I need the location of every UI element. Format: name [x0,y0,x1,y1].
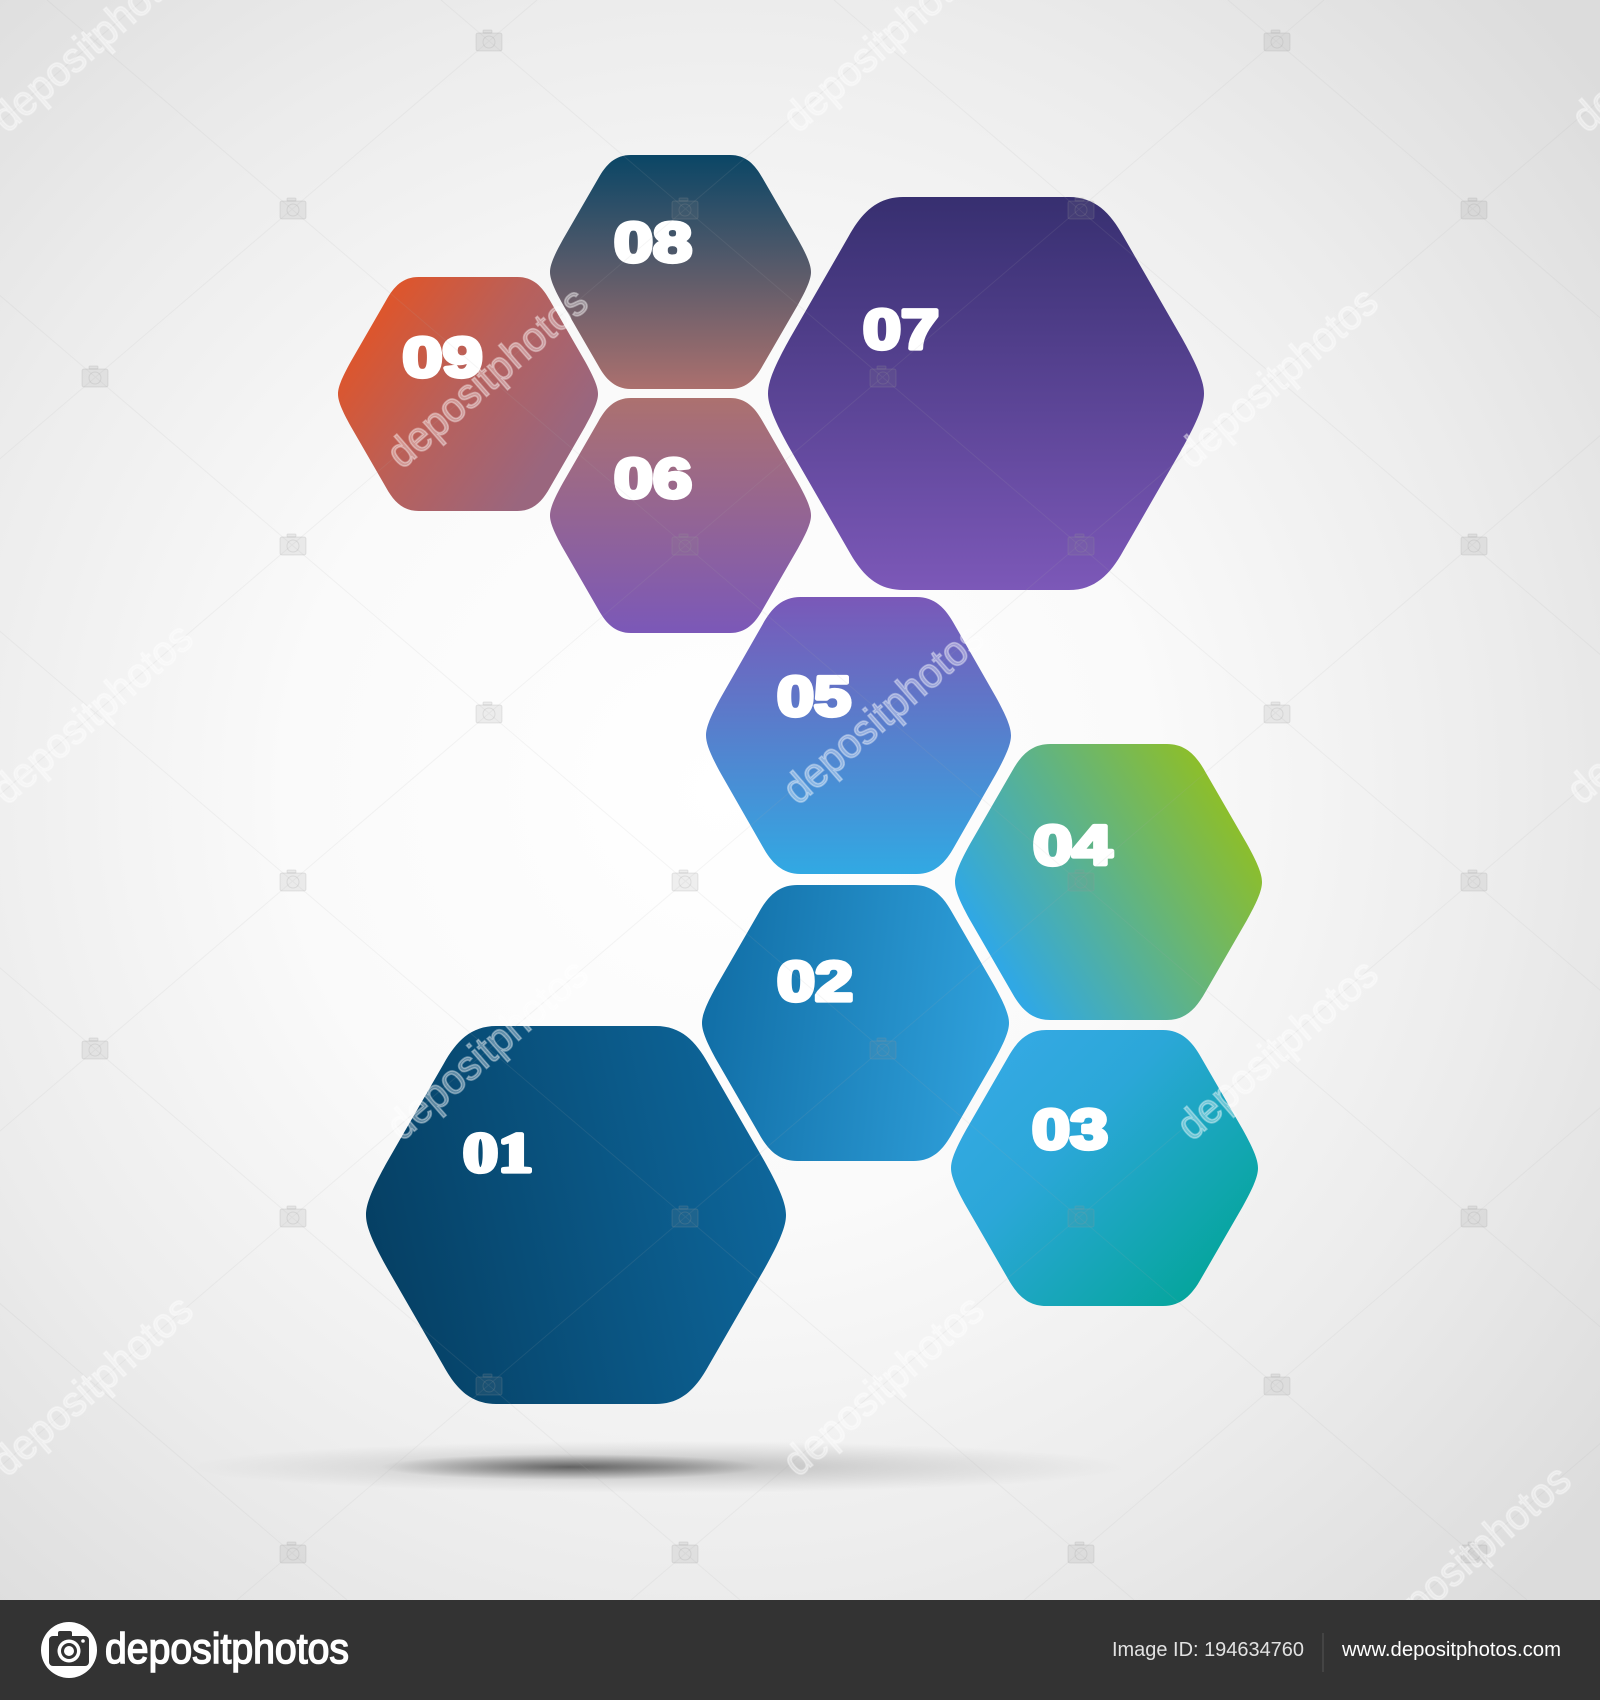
hexagon 02 [702,885,1009,1161]
hexagon 03: 03 [1032,1098,1108,1160]
depositphotos diagonal watermarks: depositphotos [377,949,597,1149]
hexagon 08 [550,155,811,389]
hexagons with numbers [338,155,1262,1404]
footer bar [0,1600,1600,1700]
hexagon 02: 02 [777,950,853,1012]
depositphotos diagonal watermarks: depositphotos [1167,277,1387,477]
hexagon 01 [366,1026,786,1404]
watermark camera icons [82,30,1487,1563]
depositphotos diagonal watermarks: depositphotos [1167,949,1387,1149]
hexagon 07 [768,197,1204,590]
floor shadow [190,1441,1130,1493]
hexagon 08: 08 [614,210,692,274]
hexagon 05 [706,597,1011,874]
hexagon 01: 01 [463,1122,533,1184]
hexagon 07: 07 [863,298,939,360]
hexagon 03 [951,1030,1258,1306]
icon: depositphotos camera logo [41,1622,97,1678]
depositphotos diagonal watermarks: depositphotos [773,613,993,813]
hexagon 04: 04 [1033,814,1112,876]
website url: www.depositphotos.com [1341,1639,1561,1661]
depositphotos diagonal watermarks: depositphotos [1360,1455,1580,1655]
hexagon 09: 09 [402,326,482,388]
depositphotos diagonal watermarks: depositphotos [773,1285,993,1485]
hexagon 09 [338,277,598,511]
logo wordmark: depositphotos [105,1625,349,1673]
hexagon 04 [955,744,1262,1020]
hexagon 05: 05 [777,664,851,728]
image id: Image ID: 194634760 [1112,1639,1304,1661]
depositphotos diagonal watermarks: depositphotos [377,277,597,477]
hexagon 06 [550,398,811,633]
hexagon 06: 06 [614,446,692,510]
